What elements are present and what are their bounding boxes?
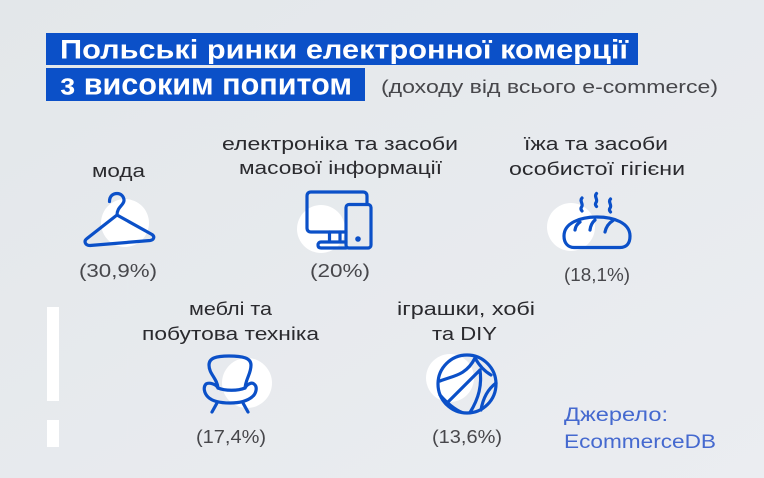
white exclamation decoration [47,307,59,447]
item: toys and hobbies [397,299,535,447]
label: toys and hobbies [397,299,535,344]
label: fashion: мода [92,161,146,181]
label: food and hygiene: особистої гігієни [509,159,685,179]
value: food and hygiene: (18,1%) [564,265,630,285]
value: furniture: (17,4%) [196,427,266,447]
icon: basketball [426,354,496,413]
value: toys and hobbies: (13,6%) [432,427,502,447]
icon: armchair [204,356,272,412]
label: furniture [142,299,320,344]
label: food and hygiene [509,134,685,179]
icon: computer and phone [297,192,371,253]
source note: Джерело: [564,405,668,426]
item: electronics [222,134,458,281]
title: Польські ринки електронної комерції [60,34,630,64]
item: food and hygiene [509,134,685,285]
label: electronics: електроніка та засоби [222,134,458,154]
item: fashion [79,161,157,281]
icon: hanger [85,194,154,247]
source note [564,405,716,453]
label: furniture: меблі та [189,299,273,319]
title: з високим попитом [60,66,352,102]
item: furniture [142,299,320,447]
label: electronics [222,134,458,178]
value: electronics: (20%) [310,261,370,281]
source note: EcommerceDB [564,432,716,453]
value: fashion: (30,9%) [79,261,157,281]
label: food and hygiene: їжа та засоби [523,134,668,154]
label: toys and hobbies: іграшки, хобі [397,299,535,319]
title [46,33,638,102]
icon: bread [547,194,630,251]
subtitle: (доходу від всього e-commerce) [381,77,718,97]
label: furniture: побутова техніка [142,324,320,344]
label: toys and hobbies: та DIY [432,324,497,344]
label: electronics: масової інформації [239,158,442,178]
